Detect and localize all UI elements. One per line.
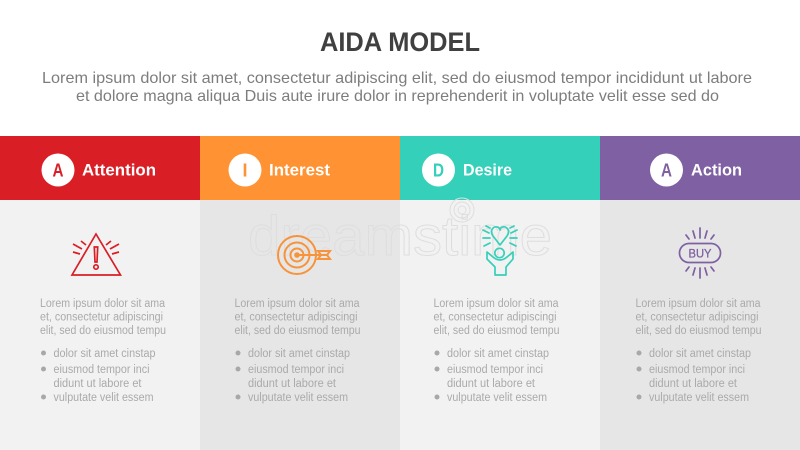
subtitle text bbox=[42, 70, 752, 105]
icon: target with arrow bbox=[278, 236, 330, 274]
description: desire bbox=[434, 298, 560, 337]
bullet list: attention: eiusmod tempor inci bbox=[54, 364, 150, 376]
description: desire: et, consectetur adipiscingi bbox=[434, 312, 556, 324]
bullet list: desire: eiusmod tempor inci bbox=[447, 364, 543, 376]
bullet list: desire: vulputate velit essem bbox=[447, 392, 547, 404]
description: desire: elit, sed do eiusmod tempu bbox=[434, 325, 560, 337]
bullet list: attention bbox=[41, 348, 156, 404]
header: interest: I bbox=[242, 160, 248, 180]
icon: buy button bbox=[680, 228, 720, 278]
description: attention: Lorem ipsum dolor sit ama bbox=[40, 298, 166, 310]
bullet list: interest bbox=[236, 348, 350, 404]
bullet list: action: eiusmod tempor inci bbox=[649, 364, 745, 376]
bullet list: attention: dolor sit amet cinstap bbox=[54, 348, 156, 360]
description: action: et, consectetur adipiscingi bbox=[636, 312, 758, 324]
bullet list: attention: vulputate velit essem bbox=[54, 392, 154, 404]
bullet list: attention: didunt ut labore et bbox=[54, 378, 142, 390]
bullet list: action: dolor sit amet cinstap bbox=[649, 348, 751, 360]
title: AIDA MODEL bbox=[320, 27, 480, 57]
description: attention: elit, sed do eiusmod tempu bbox=[40, 325, 166, 337]
bullet list: interest: eiusmod tempor inci bbox=[248, 364, 344, 376]
header: desire: D bbox=[433, 160, 444, 180]
header: interest bbox=[200, 136, 400, 200]
description: action bbox=[636, 298, 762, 337]
description: interest: elit, sed do eiusmod tempu bbox=[234, 325, 360, 337]
description: interest: Lorem ipsum dolor sit ama bbox=[234, 298, 360, 310]
header: attention: A bbox=[52, 160, 64, 180]
header: desire: Desire bbox=[463, 162, 512, 180]
bullet list: desire: didunt ut labore et bbox=[447, 378, 536, 390]
watermark: dreamstime bbox=[248, 204, 552, 267]
panel: desire column bbox=[400, 136, 600, 450]
description: interest bbox=[234, 298, 360, 337]
icon: warning triangle bbox=[72, 234, 120, 275]
header: action: Action bbox=[691, 162, 742, 180]
description: interest: et, consectetur adipiscingi bbox=[234, 312, 358, 324]
header: attention: Attention bbox=[82, 162, 156, 180]
bullet list: desire: dolor sit amet cinstap bbox=[447, 348, 549, 360]
description: action: elit, sed do eiusmod tempu bbox=[636, 325, 762, 337]
description: desire: Lorem ipsum dolor sit ama bbox=[434, 298, 559, 310]
bullet list: interest: vulputate velit essem bbox=[248, 392, 348, 404]
description: attention bbox=[40, 298, 166, 337]
header: attention bbox=[0, 136, 200, 200]
bullet list: action bbox=[636, 348, 751, 404]
bullet list: action: didunt ut labore et bbox=[649, 378, 738, 390]
subtitle text: Lorem ipsum dolor sit amet, consectetur adipiscing elit, sed do eiusmod tempor incididunt ut labore bbox=[42, 70, 752, 87]
icon: buy button: BUY bbox=[688, 246, 712, 260]
icon: hands holding heart bbox=[483, 226, 517, 275]
description: action: Lorem ipsum dolor sit ama bbox=[636, 298, 761, 310]
panel: action column bbox=[600, 136, 800, 450]
bullet list: desire bbox=[434, 348, 549, 404]
bullet list: interest: dolor sit amet cinstap bbox=[248, 348, 350, 360]
header: action: A bbox=[661, 160, 672, 180]
panel: attention column bbox=[0, 136, 200, 450]
header: desire bbox=[400, 136, 600, 200]
subtitle text: et dolore magna aliqua Duis aute irure dolor in reprehenderit in voluptate velit esse sed do bbox=[76, 88, 719, 105]
bullet list: interest: didunt ut labore et bbox=[248, 378, 337, 390]
description: attention: et, consectetur adipiscingi bbox=[40, 312, 163, 324]
header: action bbox=[600, 136, 800, 200]
bullet list: action: vulputate velit essem bbox=[649, 392, 749, 404]
header: interest: Interest bbox=[269, 162, 331, 180]
panel: interest column bbox=[200, 136, 400, 450]
